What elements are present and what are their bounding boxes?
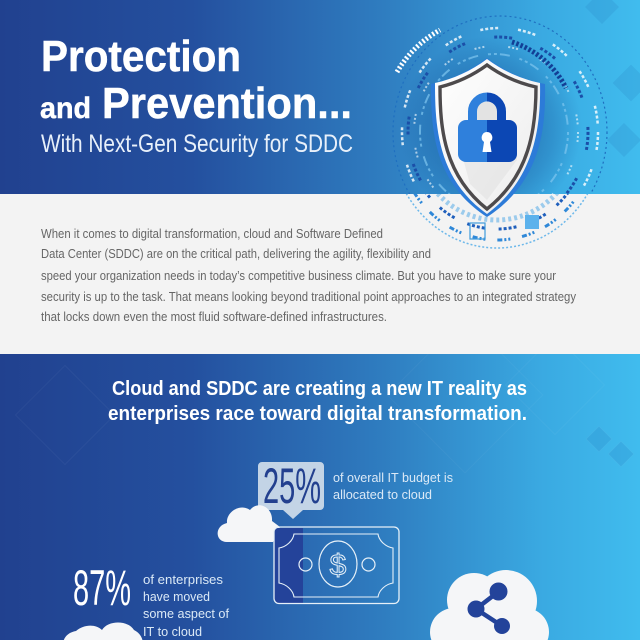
cloud [430,570,549,640]
title line: and Prevention: and [40,92,91,125]
description: have moved [143,589,210,604]
intro paragraph [41,227,577,324]
ring detail squares [470,215,539,239]
icon: security shield with digital rings [390,16,607,248]
background pattern: header diamonds [585,0,640,157]
title line: and Prevention: Prevention... [102,79,352,128]
description [333,470,453,502]
subtitle: With Next-Gen Security for SDDC [41,130,353,158]
number: 25% [263,458,321,514]
description: some aspect of [143,606,229,621]
lock right half [487,92,517,162]
bill dark strip [274,528,303,603]
shackle inner [477,102,497,122]
lock shadow [458,140,517,200]
background pattern: lower diamonds [518,370,634,466]
stat callout: 25 percent [258,458,453,519]
bill inner frame [279,534,393,597]
section heading: Cloud and SDDC are creating a new IT reality as [112,378,527,400]
icon: dollar bill [274,527,399,604]
light content band [0,194,640,354]
share symbol [468,582,510,634]
description: of enterprises [143,572,224,587]
intro paragraph: When it comes to digital transformation, cloud and Software Defined [41,227,383,241]
bill outer frame [274,527,399,604]
stat callout: 87 percent [73,560,229,639]
icon: cloud bottom left [63,622,143,640]
lower section background [0,354,640,640]
intro paragraph: security is up to the task. That means looking beyond traditional point approaches to an integrated strategy [41,290,577,304]
shield body [435,59,540,214]
navy dot cluster top right [512,42,566,88]
icon: share cloud [430,570,549,640]
icon: padlock [458,97,517,162]
digital data rings on light band [406,194,588,249]
white dot cluster top left [397,30,440,72]
dollar sign: $ [330,549,347,582]
description: of overall IT budget is [333,470,453,485]
shield outer edge [431,58,545,217]
section heading [108,378,527,425]
description [143,572,229,639]
intro paragraph: Data Center (SDDC) are on the critical path, delivering the agility, flexibility and [41,247,431,261]
title line: Protection: Protection [41,32,241,81]
title block [40,32,353,158]
shield inner outline [440,65,536,209]
digital ring glow [415,48,574,194]
intro paragraph: that locks down even the most fluid software-defined infrastructures. [41,310,387,324]
description: allocated to cloud [333,487,432,502]
section heading: enterprises race toward digital transformation. [108,403,527,425]
header band [0,0,640,194]
bill oval [319,541,357,587]
number: 87% [73,560,131,616]
intro paragraph: speed your organization needs in today’s competitive business climate. But you have to make sure your [41,269,556,283]
digital data rings on blue [392,15,608,194]
description: IT to cloud [143,624,202,639]
speech bubble [258,462,324,519]
keyhole [482,132,492,152]
lock left half [458,92,487,162]
bill side circles [299,558,312,571]
icon: small cloud [218,505,280,542]
